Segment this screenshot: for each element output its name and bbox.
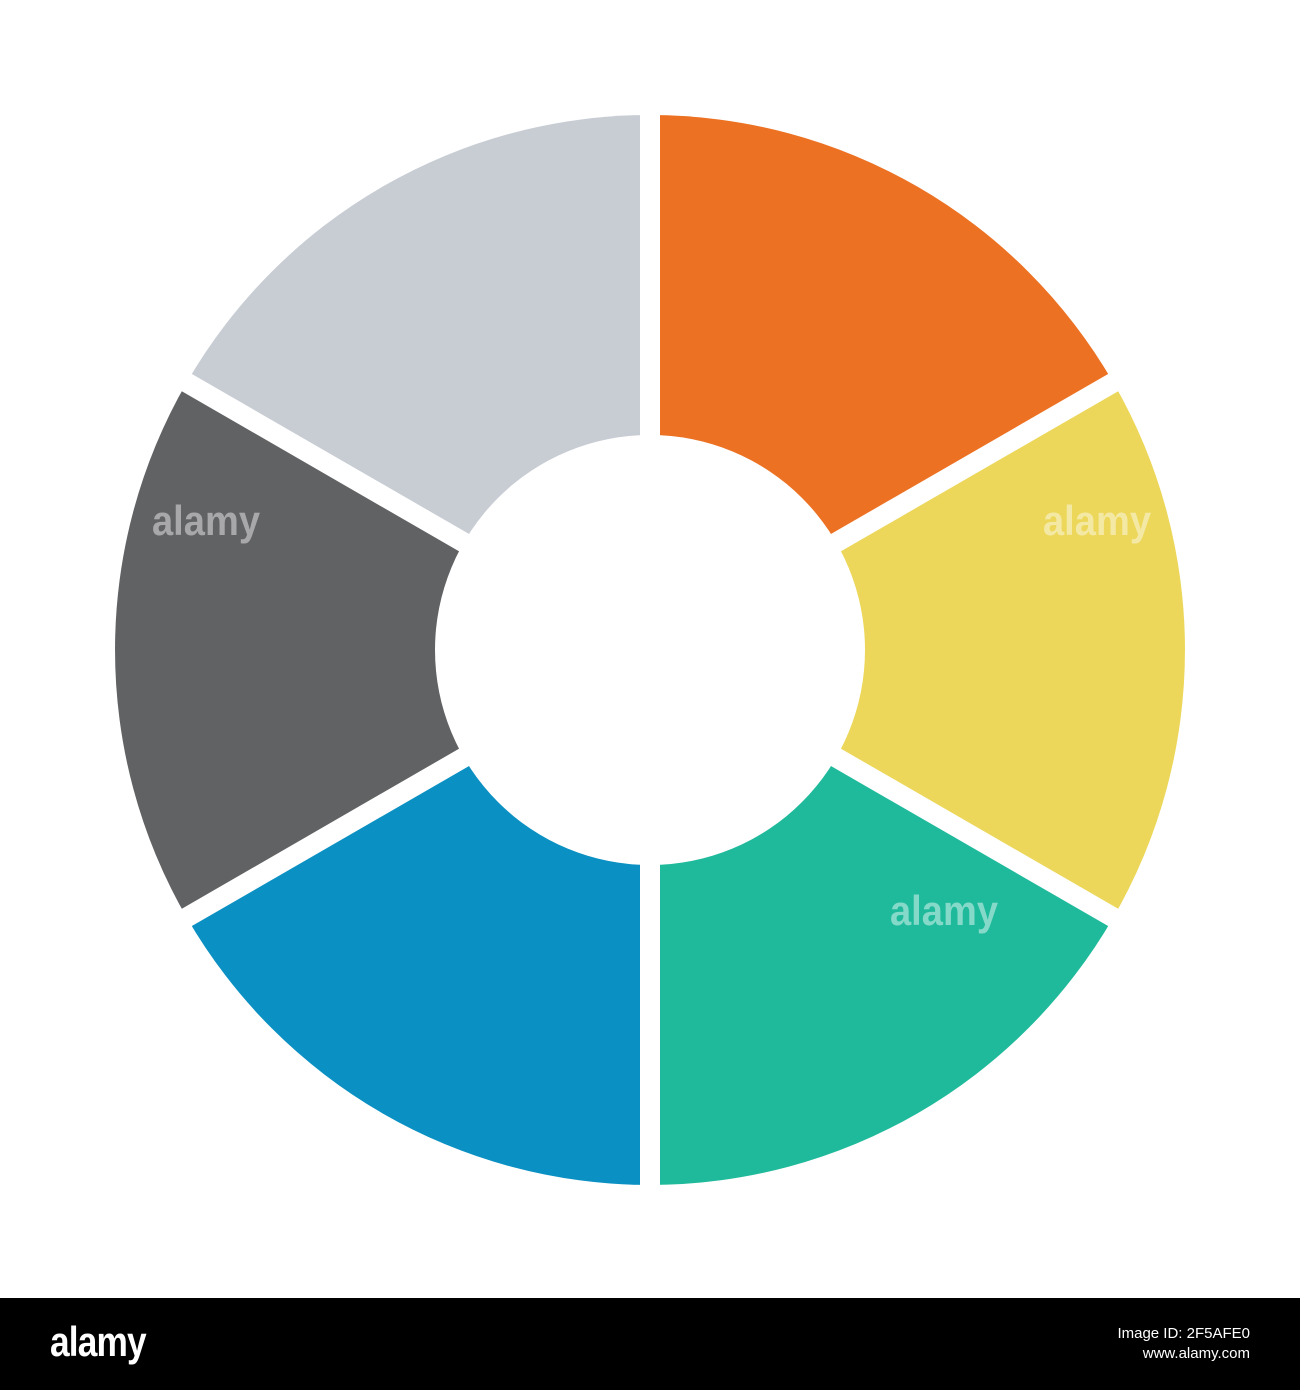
footer bar <box>0 1298 1300 1390</box>
segment: blue <box>187 650 650 1185</box>
segment: teal <box>650 650 1113 1185</box>
center hole <box>435 435 865 865</box>
footer id text: Image ID: 2F5AFE0 <box>1117 1325 1250 1342</box>
footer id text: www.alamy.com <box>1143 1345 1250 1362</box>
watermarks: alamy <box>890 887 999 934</box>
footer logo: alamy <box>50 1318 146 1365</box>
footer id text <box>1117 1325 1250 1362</box>
watermarks: alamy <box>152 497 261 544</box>
watermarks <box>152 497 1152 934</box>
segment: dark gray <box>115 382 650 918</box>
segment: yellow <box>650 382 1185 918</box>
segment: light gray <box>187 115 650 650</box>
watermarks: alamy <box>1043 497 1152 544</box>
segment: orange <box>650 115 1113 650</box>
